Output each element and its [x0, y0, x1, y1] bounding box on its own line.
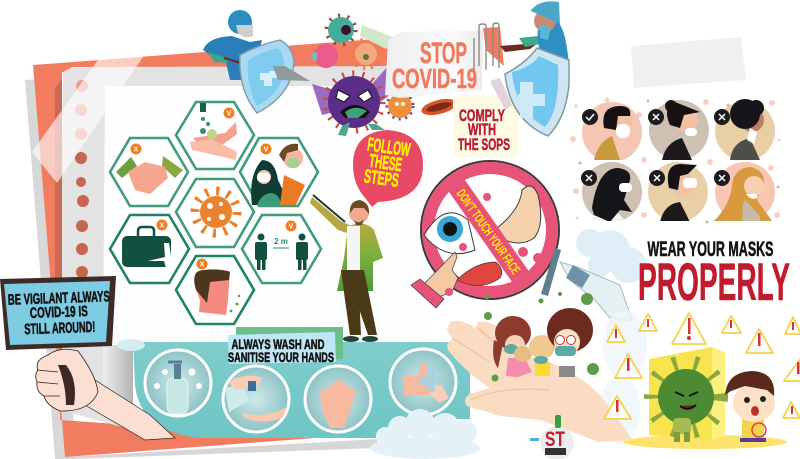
- speech bubble: follow these steps: THESE: [368, 151, 403, 176]
- sign: be vigilant: BE VIGILANT ALWAYS: [8, 288, 110, 309]
- bacteria: [420, 96, 458, 118]
- hexagon: masked people: [240, 138, 318, 206]
- presenter figure: [310, 195, 383, 342]
- sign: be vigilant: COVID-19 IS: [30, 303, 88, 322]
- pink germs: [445, 193, 543, 296]
- small orange virus: [388, 94, 412, 118]
- banner: stop covid: [385, 23, 504, 98]
- translucent tape: [32, 50, 143, 183]
- mask profile: neck: [715, 99, 775, 161]
- mask profile: blonde woman: [714, 162, 775, 222]
- warning triangles: [604, 313, 800, 419]
- doctor right with shield: [500, 1, 569, 136]
- mask status badges: [581, 109, 730, 186]
- boy hiding: [725, 371, 775, 442]
- binder holes: [75, 80, 89, 278]
- hexagon: masked people: V: [264, 146, 269, 154]
- ST logo with pin: ST: [545, 428, 565, 451]
- lips: [457, 262, 502, 286]
- hexagon: virus: [176, 179, 254, 247]
- prohibition band: DON'T TOUCH YOUR FACE: [454, 186, 523, 277]
- yellow box: [649, 347, 725, 440]
- prohibition band: [444, 174, 533, 289]
- sign: be vigilant: STILL AROUND!: [24, 319, 96, 338]
- eye: [424, 213, 475, 254]
- hexagon: handshake: X: [134, 146, 139, 154]
- step circle: rubbing hands: [305, 366, 371, 432]
- hexagon: coughing: X: [200, 262, 205, 268]
- ST logo with pin: [530, 415, 574, 459]
- hexagon: luggage travel: [110, 215, 189, 283]
- mask profile: under nose long hair: [582, 162, 642, 222]
- doctor left with shield and spear: [203, 10, 310, 113]
- step circle: sanitiser bottle: [145, 350, 211, 416]
- hexagon: wash hands: V: [227, 110, 232, 118]
- mask profile: eyes covered: [648, 162, 708, 222]
- open hand: [447, 312, 632, 442]
- clouds at band edge: [117, 339, 480, 459]
- hexagon: handshake: [110, 138, 188, 206]
- heading: always wash: ALWAYS WASH AND: [232, 336, 324, 352]
- speech bubble: follow these steps: STEPS: [363, 166, 400, 192]
- hexagon: luggage travel: X: [160, 222, 165, 230]
- note: comply with the sops: [453, 78, 519, 158]
- fist and arm: [36, 349, 175, 440]
- warning marks: [615, 318, 800, 414]
- heading: always wash: SANITISE YOUR HANDS: [228, 349, 334, 365]
- hexagon: wash hands: [176, 102, 254, 169]
- speech bubble: follow these steps: FOLLOW: [366, 135, 412, 161]
- hexagon: coughing: [176, 256, 254, 324]
- sign: be vigilant: [0, 276, 116, 350]
- speech bubble: follow these steps: [353, 130, 423, 207]
- hexagon: distancing 2 m: 2 m: [274, 237, 288, 246]
- nose: [497, 186, 541, 243]
- note: comply with the sops: COMPLY: [459, 106, 505, 125]
- hexagon: distancing 2 m: [242, 215, 321, 283]
- note: comply with the sops: THE SOPS: [458, 135, 510, 154]
- background paper frame: [25, 38, 425, 459]
- green virus villain: [652, 363, 720, 442]
- hexagon: distancing 2 m: V: [289, 224, 294, 230]
- children wearing masks: [493, 308, 593, 377]
- purple bat virus: [312, 66, 390, 136]
- banner: stop covid: COVID-19: [392, 63, 477, 94]
- teal handwashing band: [133, 342, 470, 438]
- right white panel tape: [631, 37, 746, 88]
- floor puddle: [623, 435, 787, 449]
- no touching your face sign: [411, 161, 559, 308]
- virus cluster: [310, 16, 395, 68]
- pointing hand: [424, 252, 458, 298]
- step circle: thumbs up: [390, 349, 456, 415]
- heading: always wash: [228, 327, 343, 365]
- mask profile: correct: [582, 102, 642, 162]
- note: comply with the sops: WITH: [468, 120, 496, 139]
- spray bottle and cloud: [484, 229, 646, 320]
- pale wash behind warnings: [600, 310, 647, 445]
- mask grid confetti dots: [570, 98, 780, 224]
- banner: stop covid: STOP: [420, 37, 467, 70]
- mask profile: chin: [649, 100, 709, 160]
- step circle: pump into hand: [223, 366, 289, 432]
